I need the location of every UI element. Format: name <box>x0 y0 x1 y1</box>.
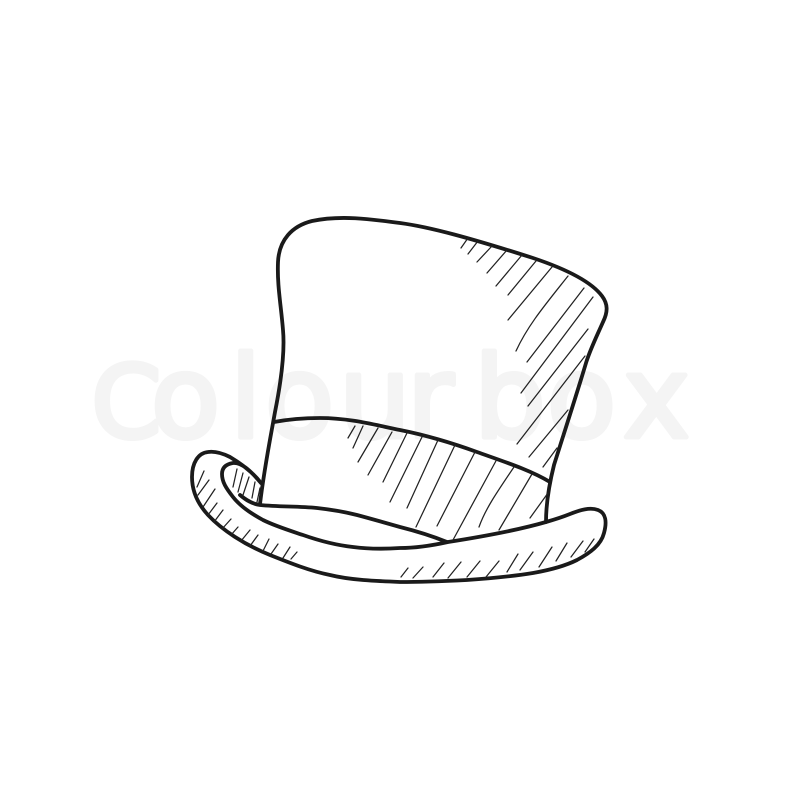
watermark text: x <box>623 332 690 464</box>
shading hatch lines <box>197 238 594 578</box>
watermark text: u <box>339 332 411 464</box>
hat outlines <box>192 218 607 582</box>
brim outer outline <box>192 452 606 582</box>
brim left hatching <box>197 471 297 559</box>
watermark text: C <box>92 344 161 461</box>
watermark text: r <box>407 332 454 464</box>
watermark text: o <box>151 332 220 464</box>
hat band top line <box>274 418 550 482</box>
watermark text: b <box>474 332 546 464</box>
hat crown outline <box>260 218 607 522</box>
inner brim hatching <box>233 469 260 502</box>
watermark text: l <box>230 332 261 464</box>
band hatching <box>348 426 548 540</box>
crown hatching <box>461 238 593 467</box>
watermark text: o <box>265 332 334 464</box>
watermark text: o <box>547 332 616 464</box>
hat base front curve <box>240 495 447 542</box>
brim right hatching <box>401 539 594 578</box>
